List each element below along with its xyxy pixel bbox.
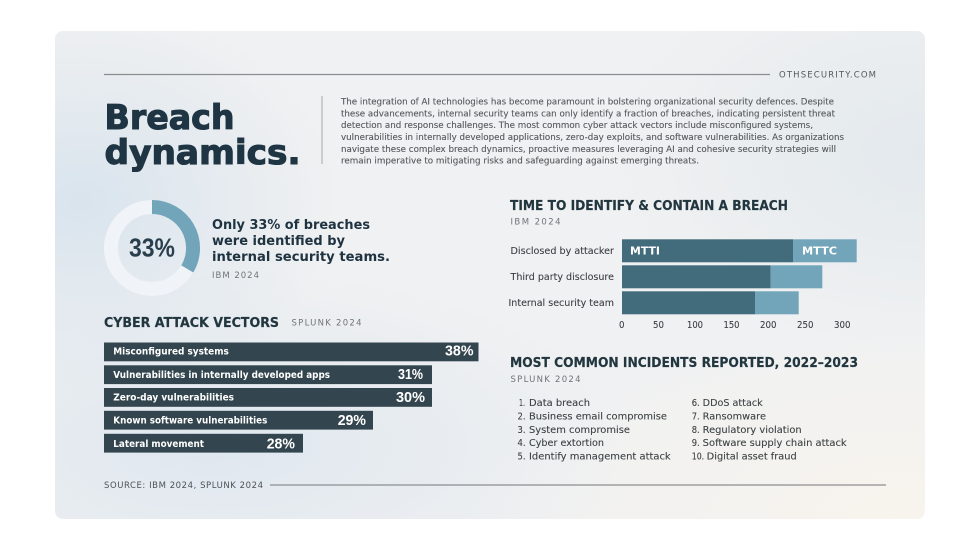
list: incidents 1 to 5: 5.: [518, 452, 526, 462]
list: incidents 6 to 10: Software supply chain attack: [703, 438, 847, 449]
list: incidents 1 to 5: 1.: [519, 398, 525, 409]
bar chart: attack vectors: Known software vulnerabilities: [113, 415, 268, 426]
intro text block: detection and response challenges. The most common cyber attack vectors include misconfigured systems,: [341, 121, 813, 131]
list: incidents 1 to 5: Identify management attack: [529, 452, 671, 462]
list: incidents 1 to 5: Data breach: [529, 398, 590, 409]
list: incidents 6 to 10: 10.: [692, 452, 704, 462]
callout: internal identification: IBM 2024: [212, 271, 259, 281]
list: incidents 6 to 10: 7.: [692, 412, 700, 422]
title: [104, 98, 300, 172]
list: incidents 1 to 5: Business email compromise: [529, 412, 667, 422]
stacked bar chart: MTTI and MTTC: 200: [760, 320, 776, 331]
callout: internal identification: internal security teams.: [212, 250, 390, 265]
callout: internal identification: Only 33% of breaches: [212, 218, 370, 233]
intro text block: [340, 98, 845, 166]
footer: source and rule: SOURCE: IBM 2024, SPLUNK 2024: [104, 481, 263, 491]
list: incidents 1 to 5: 3.: [518, 425, 526, 436]
list: incidents 1 to 5: 4.: [518, 438, 526, 449]
callout: internal identification: were identified by: [212, 234, 345, 249]
header: rule and site name: OTHSECURITY.COM: [779, 70, 876, 80]
stacked bar chart: MTTI and MTTC: 300: [834, 320, 850, 331]
stacked bar chart: MTTI and MTTC: [508, 239, 857, 331]
heading: most common incidents: [510, 355, 858, 385]
bar chart: attack vectors: 31%: [398, 367, 423, 383]
intro text block: The integration of AI technologies has become paramount in bolstering organizational security defences. Despite: [340, 98, 834, 108]
donut chart: 33%: 33%: [129, 232, 175, 262]
list: incidents 6 to 10: DDoS attack: [703, 398, 763, 409]
title: Breach: [104, 98, 234, 137]
bar chart: attack vectors: 29%: [338, 413, 366, 429]
bar chart: attack vectors: 38%: [445, 344, 474, 360]
intro text block: these advancements, internal security teams can only identify a fraction of breaches, indicating persistent threat: [341, 110, 836, 120]
heading: time to identify: IBM 2024: [510, 218, 560, 228]
heading: most common incidents: MOST COMMON INCIDENTS REPORTED, 2022–2023: [510, 355, 858, 371]
intro text block: navigate these complex breach dynamics, proactive measures leveraging AI and cohesive security strategies will: [341, 145, 836, 155]
list: incidents 1 to 5: System compromise: [529, 425, 630, 436]
list: incidents 6 to 10: 9.: [692, 438, 700, 449]
stacked bar chart: MTTI and MTTC: MTTC: [802, 244, 837, 258]
stacked bar chart: MTTI and MTTC: 0: [619, 320, 624, 331]
bar chart: attack vectors: Lateral movement: [113, 439, 204, 450]
stacked bar chart: MTTI and MTTC: Internal security team: [508, 298, 614, 309]
bar chart: attack vectors: 28%: [267, 436, 295, 452]
intro text block: remain imperative to mitigating risks and safeguarding against emerging threats.: [341, 156, 699, 166]
stacked bar chart: MTTI and MTTC: 150: [724, 320, 740, 331]
list: incidents 6 to 10: Digital asset fraud: [707, 452, 797, 462]
list: incidents 1 to 5: [518, 398, 671, 462]
bar chart: attack vectors: Zero-day vulnerabilities: [113, 392, 234, 404]
intro text block: vulnerabilities in internally developed applications, zero-day exploits, and software vulnerabilities. As organizations: [341, 133, 845, 143]
bar chart: attack vectors: Misconfigured systems: [113, 346, 229, 358]
panel: background card: [55, 31, 925, 519]
list: incidents 6 to 10: Ransomware: [703, 412, 766, 422]
list: incidents 6 to 10: [692, 398, 847, 462]
list: incidents 1 to 5: 2.: [518, 412, 526, 422]
title: dynamics.: [104, 133, 300, 172]
heading: cyber attack vectors: SPLUNK 2024: [292, 318, 362, 328]
stacked bar chart: MTTI and MTTC: 100: [687, 320, 703, 331]
stacked bar chart: MTTI and MTTC: 250: [797, 320, 814, 331]
bar chart: attack vectors: [104, 342, 478, 453]
stacked bar chart: MTTI and MTTC: MTTI: [630, 244, 660, 258]
list: incidents 6 to 10: 8.: [692, 425, 700, 436]
stacked bar chart: MTTI and MTTC: 50: [653, 320, 664, 331]
donut chart: 33%: [111, 207, 193, 289]
stacked bar chart: MTTI and MTTC: Disclosed by attacker: [510, 246, 614, 257]
heading: time to identify: TIME TO IDENTIFY & CONTAIN A BREACH: [510, 198, 788, 214]
bar chart: attack vectors: 30%: [396, 390, 425, 406]
bar chart: attack vectors: Vulnerabilities in internally developed apps: [113, 370, 330, 381]
list: incidents 6 to 10: Regulatory violation: [703, 425, 802, 436]
list: incidents 6 to 10: 6.: [692, 398, 700, 409]
heading: time to identify: [510, 198, 788, 228]
stacked bar chart: MTTI and MTTC: Third party disclosure: [510, 272, 614, 283]
callout: internal identification: [212, 218, 390, 281]
heading: cyber attack vectors: CYBER ATTACK VECTORS: [104, 315, 279, 331]
heading: most common incidents: SPLUNK 2024: [510, 375, 580, 385]
list: incidents 1 to 5: Cyber extortion: [529, 438, 604, 449]
